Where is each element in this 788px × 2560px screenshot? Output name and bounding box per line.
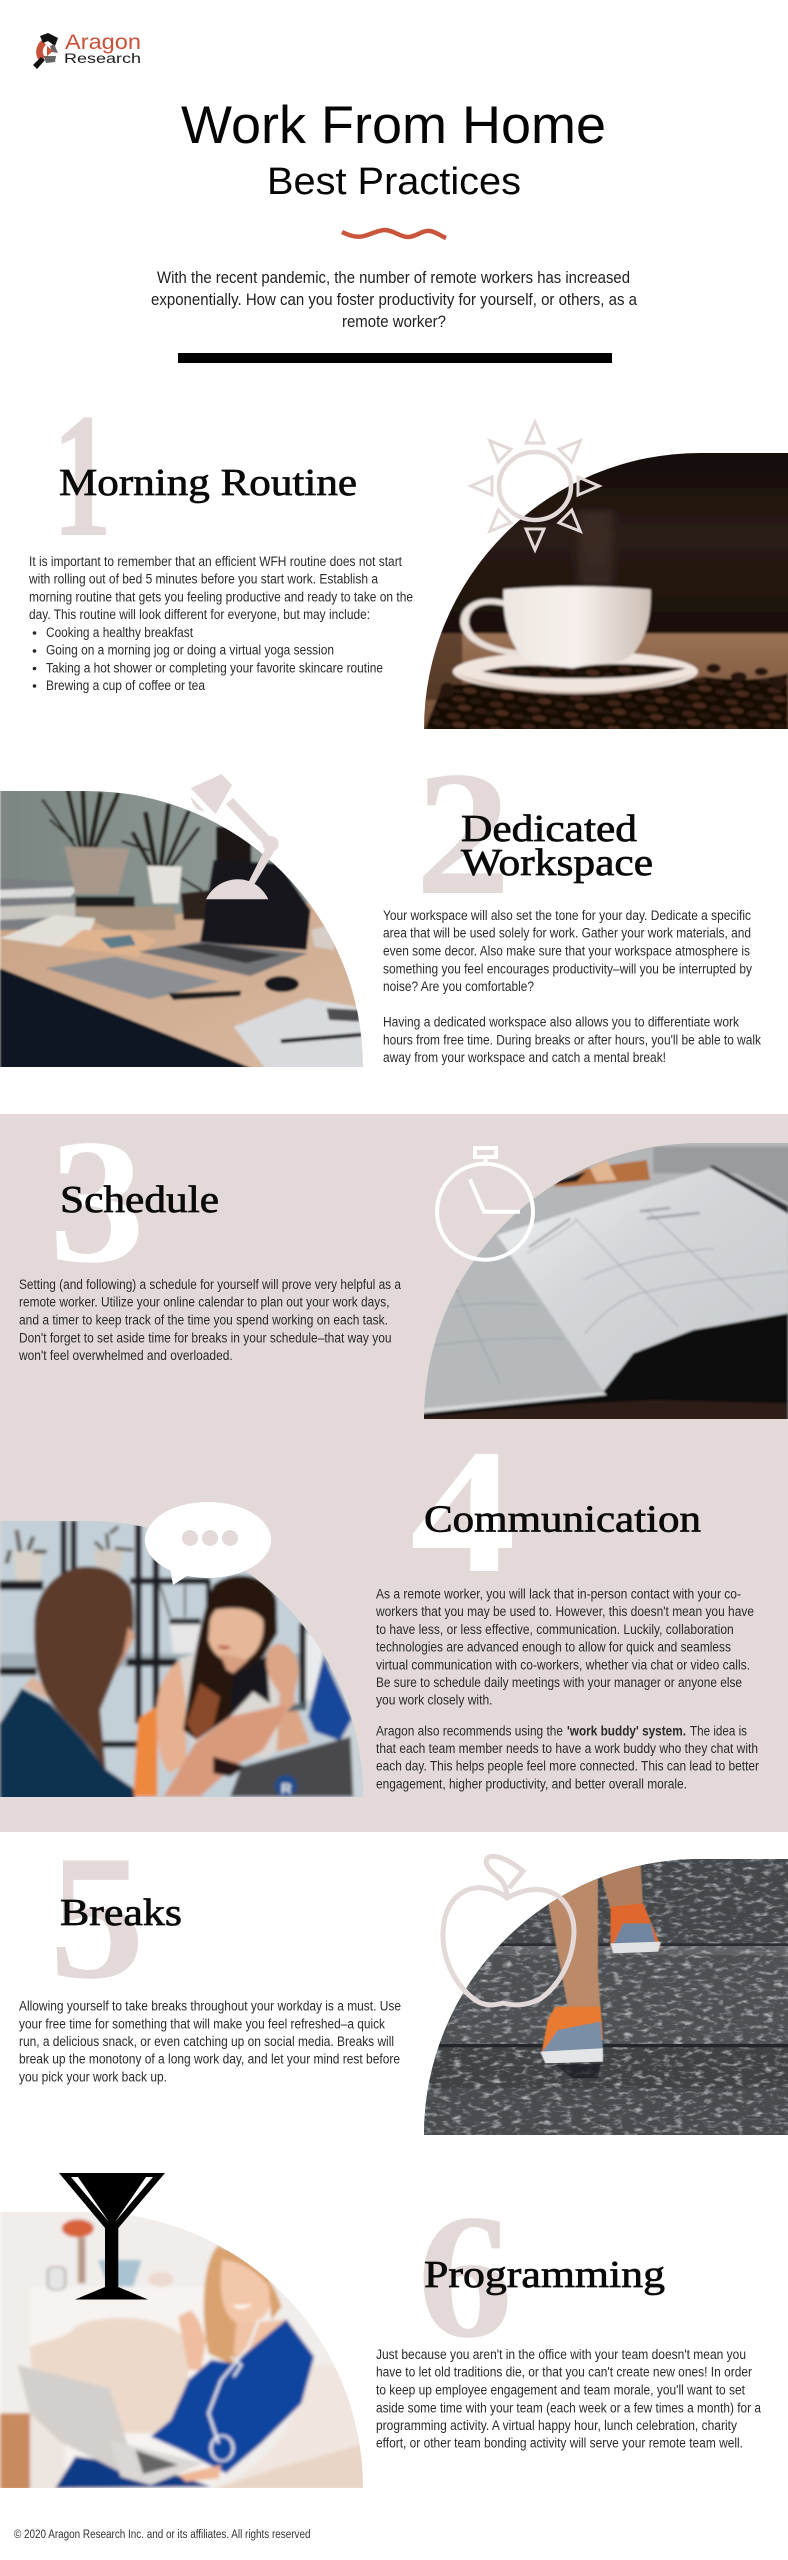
body text with bullet list: It is important to remember that an efficient WFH routine does not start	[29, 554, 402, 569]
body text: Having a dedicated workspace also allows you to differentiate work	[383, 1015, 739, 1030]
intro paragraph: With the recent pandemic, the number of remote workers has increased	[157, 269, 630, 287]
wavy accent line	[342, 230, 446, 238]
thick black divider bar	[178, 353, 612, 363]
section 3: schedule	[19, 1143, 788, 1419]
section 6: programming	[0, 2173, 761, 2490]
subtitle: Best Practices: Best Practices	[267, 161, 521, 203]
big number 5: 5	[49, 1818, 145, 2016]
body text	[376, 2347, 761, 2451]
body text with bullet list: day. This routine will look different for everyone, but may include:	[29, 607, 370, 622]
body text	[375, 1586, 759, 1791]
title: Work From Home: Work From Home	[181, 96, 606, 155]
body text: you work closely with.	[376, 1693, 492, 1708]
photo: open calendar planner	[420, 1140, 788, 1427]
body text: your free time for something that will make you feel refreshed–a quick	[19, 2016, 385, 2031]
body text	[19, 1999, 401, 2085]
body text: Aragon also recommends using the	[376, 1723, 563, 1738]
section 2: dedicated workspace	[0, 774, 761, 1067]
intro paragraph: exponentially. How can you foster productivity for yourself, or others, as a	[151, 291, 638, 309]
icon: martini glass	[59, 2173, 165, 2300]
logo word Aragon: Aragon	[65, 31, 141, 54]
body text: Be sure to schedule daily meetings with your manager or anyone else	[376, 1675, 742, 1690]
body text: have to let old traditions die, or that you can't create new ones! In order	[376, 2365, 752, 2380]
body text with bullet list: Going on a morning jog or doing a virtual yoga session	[46, 642, 334, 658]
icon: speech bubble	[145, 1502, 271, 1585]
body text: technologies are advanced enough to allow for quick and seamless	[376, 1640, 731, 1655]
big number 6: 6	[417, 2177, 513, 2375]
body text: noise? Are you comfortable?	[383, 979, 534, 994]
photo: coffee cup and beans	[417, 450, 788, 733]
big number 2: 2	[415, 734, 511, 932]
body text: effort, or other team bonding activity will serve your remote team well.	[376, 2436, 743, 2451]
heading: Morning Routine: Morning Routine	[59, 462, 357, 504]
big number 3: 3	[49, 1102, 145, 1300]
photo: running shoes on concrete stairs	[417, 1857, 788, 2140]
body text with bullet list: morning routine that gets you feeling productive and ready to take on the	[29, 589, 413, 604]
icon: sun	[471, 422, 599, 550]
big number 4: 4	[410, 1412, 516, 1610]
body text: won't feel overwhelmed and overloaded.	[18, 1348, 233, 1363]
body text: 'work buddy' system.	[567, 1723, 686, 1738]
heading: Dedicated Workspace: Dedicated	[461, 808, 637, 850]
icon: desk lamp	[191, 774, 279, 899]
logo mark	[33, 33, 58, 69]
section 5: breaks	[19, 1854, 788, 2135]
body text: and a timer to keep track of the time you spend working on each task.	[19, 1312, 388, 1327]
photo: two women talking: R	[281, 1781, 292, 1797]
photo: desk with laptop	[0, 787, 372, 1070]
body text: run, a delicious snack, or even catching up on social media. Breaks will	[19, 2034, 394, 2049]
big number 1: 1	[52, 376, 112, 574]
heading: Breaks: Breaks	[60, 1892, 182, 1934]
panel: pink background band for sections 3 and 4	[0, 1114, 788, 1832]
body text with bullet list: Cooking a healthy breakfast	[46, 625, 193, 640]
logo: Aragon Research	[33, 31, 141, 69]
icon: apple outline	[443, 1856, 574, 2005]
section 1: morning routine	[29, 418, 788, 729]
body text: something you feel encourages productivity–will you be interrupted by	[383, 961, 752, 976]
photo: woman waving at laptop	[0, 2210, 372, 2490]
body text: you pick your work back up.	[19, 2070, 167, 2085]
heading: Dedicated Workspace: Workspace	[461, 842, 653, 884]
body text: Your workspace will also set the tone for your day. Dedicate a specific	[383, 908, 751, 923]
body text: programming activity. A virtual happy hour, lunch celebration, charity	[376, 2418, 737, 2433]
section 4: communication	[0, 1412, 759, 1800]
logo word Research: Research	[64, 50, 141, 66]
body text with bullet list	[28, 554, 413, 693]
body text: to have less, or less effective, communication. Luckily, collaboration	[376, 1622, 734, 1637]
intro paragraph: remote worker?	[342, 313, 446, 331]
heading: Schedule: Schedule	[60, 1179, 219, 1221]
heading: Communication: Communication	[424, 1499, 701, 1541]
footer copyright: © 2020 Aragon Research Inc. and or its affiliates. All rights reserved	[14, 2529, 310, 2541]
photo: two women talking	[0, 1510, 370, 1800]
body text: even some decor. Also make sure that your workspace atmosphere is	[383, 944, 750, 959]
body text: Just because you aren't in the office with your team doesn't mean you	[376, 2347, 746, 2362]
heading: Dedicated Workspace	[461, 808, 653, 884]
heading: Programming: Programming	[424, 2254, 665, 2296]
body text: break up the monotony of a long work day, and let your mind rest before	[19, 2052, 400, 2067]
body text: remote worker. Utilize your online calendar to plan out your work days,	[19, 1295, 390, 1310]
body text with bullet list: Brewing a cup of coffee or tea	[46, 678, 205, 693]
body text: Don't forget to set aside time for breaks in your schedule–that way you	[19, 1330, 392, 1345]
body text: The idea is	[690, 1723, 747, 1738]
body text: Allowing yourself to take breaks throughout your workday is a must. Use	[19, 1999, 401, 2014]
body text	[18, 1277, 401, 1363]
icon: stopwatch	[437, 1148, 533, 1260]
body text: away from your workspace and catch a mental break!	[383, 1050, 666, 1065]
intro paragraph	[151, 269, 638, 331]
body text: virtual communication with co-workers, whether via chat or video calls.	[376, 1657, 750, 1672]
body text with bullet list: with rolling out of bed 5 minutes before you start work. Establish a	[28, 572, 378, 587]
body text: Setting (and following) a schedule for yourself will prove very helpful as a	[19, 1277, 401, 1292]
body text: area that will be used solely for work. Gather your work materials, and	[383, 926, 751, 941]
body text: engagement, higher productivity, and better overall morale.	[376, 1776, 687, 1791]
body text: to keep up employee engagement and team morale, you'll want to set	[376, 2382, 745, 2397]
body text with bullet list: Taking a hot shower or completing your favorite skincare routine	[46, 660, 383, 675]
body text: As a remote worker, you will lack that in-person contact with your co-	[376, 1586, 741, 1601]
body text	[383, 908, 761, 1065]
